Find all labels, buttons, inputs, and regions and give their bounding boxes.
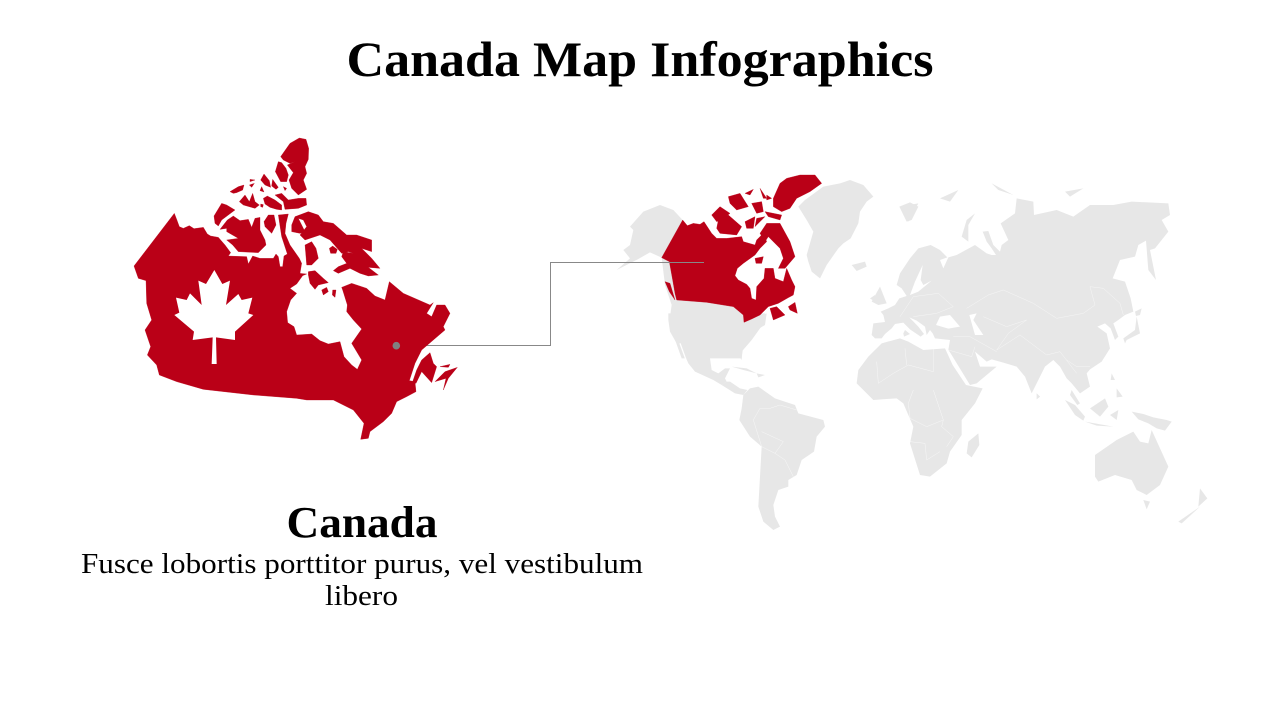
world map: Americas south and Africa [668,313,983,530]
description: libero [325,580,398,612]
Victoria [717,215,742,235]
world map: Oceania [1037,373,1207,523]
western arctic islands [214,138,309,253]
inland seas [910,265,983,335]
Canada heading: Canada [286,498,438,547]
Baffin [760,223,795,268]
eastern arctic islands [292,212,380,297]
Canada detail map [134,138,457,439]
description: Fusce lobortis porttitor purus, vel vestibulum [81,548,643,580]
Canada highlighted on world map [662,175,822,322]
connector dot [392,342,400,350]
world map: Eurasia [870,183,1170,399]
Banks [712,207,730,222]
world map [617,180,1207,530]
world map: Americas north [617,180,918,358]
connector line [396,262,704,346]
maritime provinces [413,353,437,383]
mainland [134,213,450,439]
title: Canada Map Infographics [346,31,934,87]
description [81,548,643,612]
Ellesmere [773,175,822,212]
icon: maple leaf [174,270,253,364]
